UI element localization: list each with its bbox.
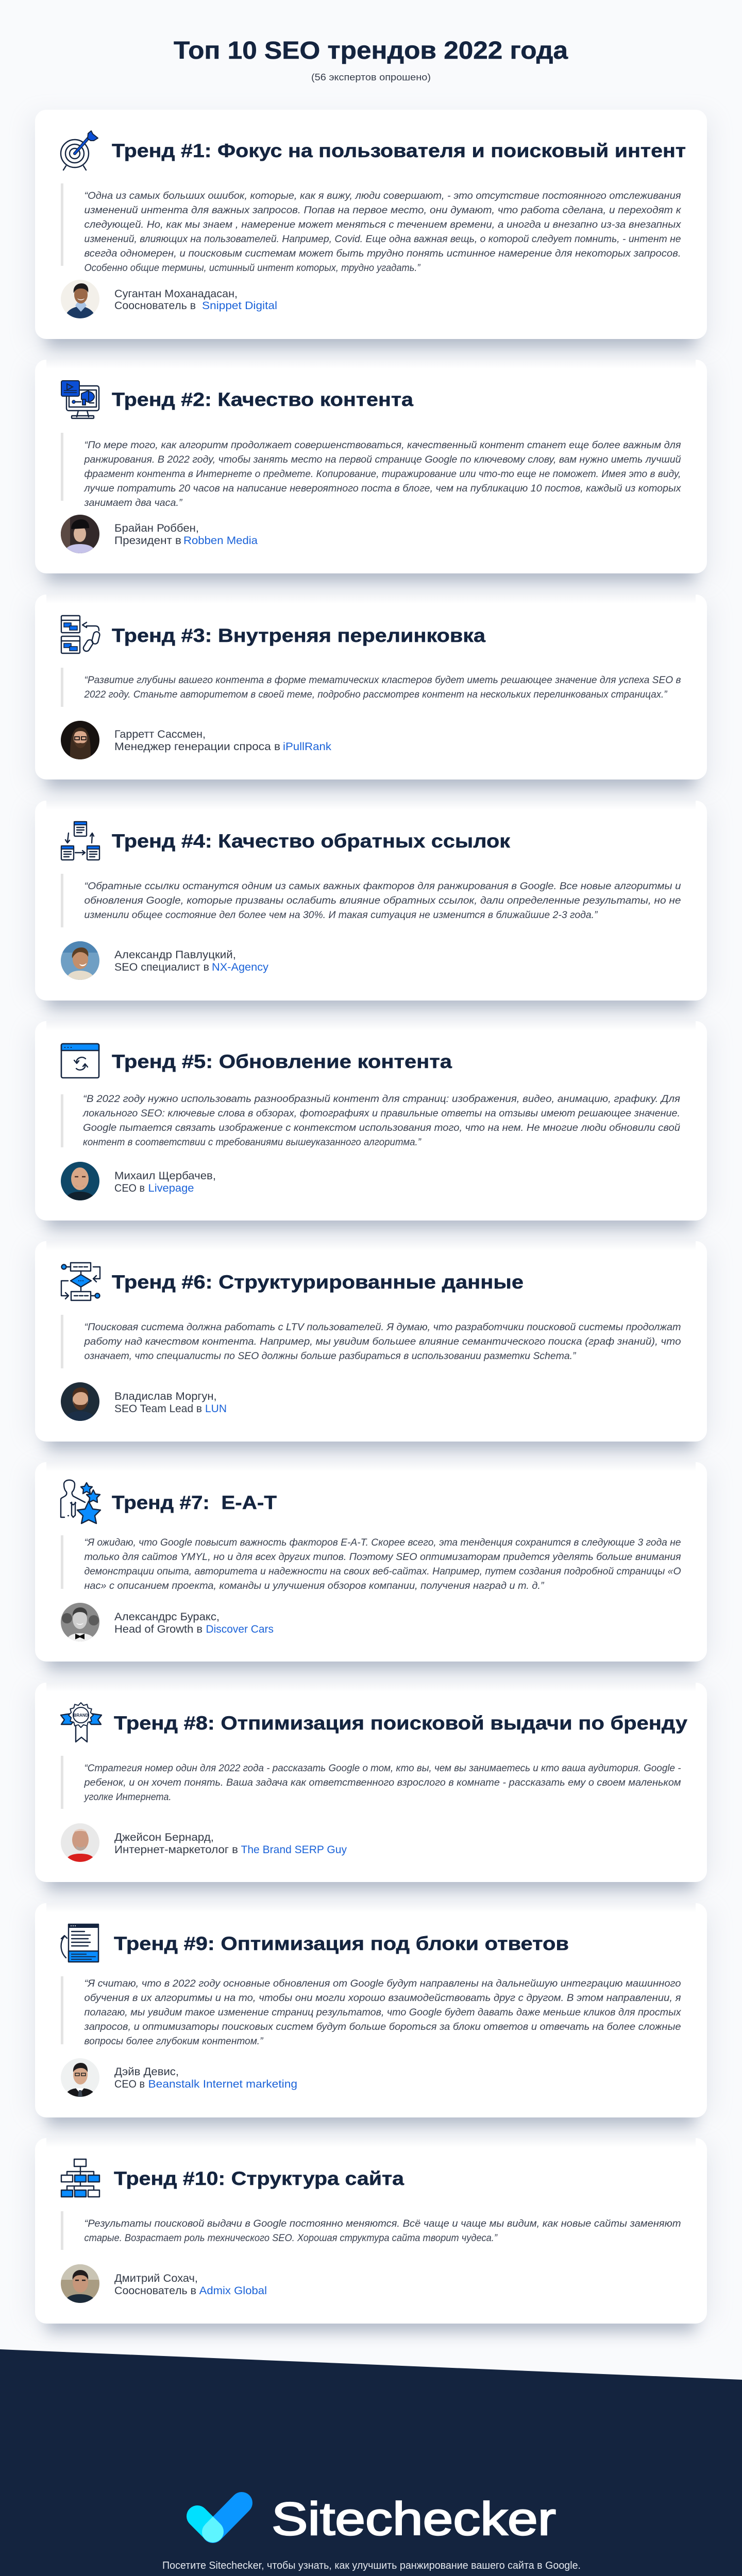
quote: вопросы более глубоким контентом.” [85, 2036, 264, 2047]
quote [85, 1537, 681, 1591]
attribution: LUN [205, 1403, 227, 1415]
title: Топ 10 SEO трендов 2022 года [174, 37, 568, 64]
quote bar [61, 874, 63, 927]
heading: Тренд #3: Внутреняя перелинковка [112, 625, 485, 646]
quote bar [61, 1976, 63, 2044]
attribution [114, 2066, 297, 2090]
quote: ребенок, и он хочет понять. Ваша задача как ответственного взрослого в комнате - рассказать ему о своем маленьком [83, 1777, 681, 1788]
attribution: Президент в [114, 535, 181, 547]
quote: всегда одномерен, и поисковым системам может быть трудно понять истинное намерение для некоторых запросов. [85, 248, 681, 259]
attribution: Дэйв Девис, [114, 2066, 179, 2078]
attribution: Соосноватeль в [114, 300, 196, 312]
heading: Тренд #6: Структурированные данные [112, 1272, 524, 1293]
attribution [114, 1611, 274, 1635]
attribution: Владислав Моргун, [114, 1391, 217, 1402]
subtitle: (56 экспертов опрошено) [311, 72, 431, 82]
quote bar [61, 1315, 63, 1368]
logo mark [197, 2503, 242, 2532]
quote: “Я ожидаю, что Google повысит важность факторов E-A-T. Скорее всего, эта тенденция сохранится в следующие 3 года не [85, 1537, 681, 1548]
quote: нас» с описанием проекта, команды и улучшения обзоров компании, получения наград и т. д.” [85, 1581, 545, 1591]
quote: локального SEO: ключевые слова в обзорах, фотографиях и правильные ответы на отзывы имеют решающее значение. [82, 1108, 680, 1119]
quote: означает, что специалисты по SEO должны больше разбираться в использовании разметки Schema.” [85, 1351, 577, 1362]
avatar: Дмитрий Сохач [61, 2264, 99, 2303]
attribution [114, 1391, 227, 1415]
quote [85, 881, 681, 921]
heading: Тренд #5: Обновление контента [112, 1051, 452, 1072]
avatar: Александрс Буракс [61, 1603, 99, 1641]
panel: trend 5 [31, 1021, 711, 1229]
avatar: Брайан Роббен [61, 515, 99, 553]
attribution: Михаил Щербачев, [114, 1170, 216, 1182]
panel: trend 6 [31, 1241, 711, 1450]
quote: запросов, и оптимизаторы поисковых систем будут больше бороться за блоки ответов и отвечать на более сложные [83, 2022, 681, 2032]
quote [83, 1978, 682, 2047]
attribution [114, 288, 277, 312]
attribution: NX-Agency [212, 961, 269, 973]
attribution: Snippet Digital [202, 300, 277, 312]
attribution: Head of Growth в [114, 1623, 203, 1635]
quote: “Я считаю, что в 2022 году основные обновления от Google будут направлены на дальнейшую интеграцию машинного [85, 1978, 681, 1989]
quote bar [61, 433, 63, 501]
attribution: Александрс Буракс, [114, 1611, 220, 1623]
panel: trend 9 [31, 1903, 711, 2126]
quote: “Обратные ссылки останутся одним из самых важных факторов для ранжирования в Google. Все новые алгоритмы и [85, 881, 681, 892]
attribution: Джейсон Бернард, [114, 1832, 214, 1843]
attribution: Александр Павлуцкий, [114, 949, 236, 961]
quote: ранжирования. В 2022 году, чтобы занять место на первой странице Google по ключевому слову, вам нужно иметь лучший [83, 454, 681, 465]
attribution: Сугантан Моханадасан, [114, 288, 238, 300]
quote [84, 675, 681, 700]
attribution: Менеджер генерации спроса в [114, 741, 280, 753]
attribution: The Brand SERP Guy [241, 1844, 347, 1856]
quote: фрагмент контента в Интернете о предмете. Копирование, тиражирование или что-то еще не поможет. Имея это в виду, [85, 469, 681, 480]
attribution: Admix Global [199, 2285, 267, 2297]
heading: Тренд #9: Оптимизация под блоки ответов [114, 1933, 569, 1954]
quote: изменили общее состояние дел более чем на 30%. И такая ситуация не изменится в ближайшие 2-3 года.” [85, 910, 598, 921]
attribution: СЕО в [114, 2078, 145, 2090]
heading: Тренд #7: E-A-T [112, 1492, 277, 1513]
avatar: Михаил Щербачев [61, 1162, 99, 1200]
quote [83, 440, 682, 509]
quote: лучше потратить 20 часов на написание невероятного поста в блоге, чем на публикацию 10 постов, каждый из которых [83, 483, 682, 494]
attribution [114, 522, 258, 547]
avatar: Александр Павлуцкий [61, 941, 99, 980]
tagline: Посетите Sitechecker, чтобы узнать, как улучшить ранжирование вашего сайта в Google. [162, 2560, 581, 2571]
attribution: Гарретт Сассмен, [114, 728, 206, 740]
quote: “По мере того, как алгоритм продолжает совершенствоваться, качественный контент станет еще более важным для [85, 440, 681, 451]
attribution: Брайан Роббен, [114, 522, 199, 534]
quote: работу над качеством контента. Например, мы увидим большее влияние семантического поиска (граф знаний), что [83, 1336, 681, 1347]
attribution: Discover Cars [206, 1623, 274, 1635]
panel: trend 2 [31, 360, 711, 582]
quote: контент в соответствии с требованиями вышеуказанного алгоритма.” [83, 1137, 422, 1148]
icon: brand badge: BRAND [74, 1713, 89, 1718]
panel: trend 7 [31, 1462, 711, 1670]
quote bar [61, 1756, 63, 1809]
icon: target with arrow [61, 131, 98, 170]
quote: обновления Google, которые призваны ослабить влияние обратных ссылок, дали определенные результаты, но не [85, 895, 681, 906]
quote: “Результаты поисковой выдачи в Google постоянно меняются. Всё чаще и чаще мы видим, как новые сайты заменяют [85, 2218, 681, 2229]
quote [83, 1763, 681, 1803]
attribution [114, 1170, 216, 1194]
quote [83, 1322, 681, 1362]
quote: обучения в их алгоритмы и на то, чтобы они могли хорошо взаимодействовать друг с другом. В этом направлении, я [85, 1993, 681, 2004]
quote: Особенно общие термины, истинный интент которых, трудно угадать.” [85, 263, 421, 274]
attribution: Дмитрий Сохач, [114, 2273, 198, 2284]
quote: уголке Интернета. [83, 1792, 171, 1803]
avatar: Владислав Моргун [61, 1382, 99, 1421]
attribution: Соосноватeль в [114, 2285, 196, 2297]
attribution: Интернет-маркетолог в [114, 1844, 238, 1856]
icon: monitor with video card [61, 381, 99, 418]
attribution: SEO Team Lead в [114, 1403, 202, 1415]
attribution: iPullRank [283, 741, 332, 753]
quote: “Развитие глубины вашего контента в форме тематических кластеров будет иметь решающее значение для успеха SEO в [85, 675, 681, 686]
avatar: Сугантан Моханадасан [61, 280, 99, 318]
icon: answer block document [61, 1924, 98, 1962]
quote bar [61, 1535, 63, 1589]
footer panel [0, 2349, 742, 2576]
quote bar [61, 183, 63, 266]
quote [85, 191, 682, 274]
icon: site structure tree [61, 2159, 99, 2197]
attribution: Beanstalk Internet marketing [148, 2078, 297, 2090]
avatar: Дэйв Девис [61, 2058, 99, 2097]
quote: Google пытается связать изображение с контекстом использования того, что на нем. Не многие люди обновили свой [83, 1123, 680, 1133]
quote: изменений, влияющих на пользователей. Например, Covid. Еще одна важная вещь, о которой следует помнить, - интент не [85, 234, 681, 245]
quote: “Стратегия номер один для 2022 года - рассказать Google о том, кто вы, чем вы занимаетесь и кто ваша аудитория. Google - [85, 1763, 681, 1774]
quote: следующей. Но, как мы знаем , намерение может меняться с течением времени, а иногда и внезапно из-за внезапных [85, 219, 682, 230]
quote: “Поисковая система должна работать с LTV пользователей. Я думаю, что разработчики поисковой системы продолжат [85, 1322, 681, 1333]
quote: только для сайтов YMYL, но и для всех других типов. Поэтому SEO оптимизаторам придется уделять больше внимания [85, 1552, 681, 1563]
avatar: Гарретт Сассмен [61, 721, 99, 759]
quote: “В 2022 году нужно использовать разнообразный контент для страниц: изображения, видео, анимацию, графику. Для [83, 1094, 680, 1105]
panel: trend 10 [31, 2138, 711, 2332]
heading: Тренд #1: Фокус на пользователя и поисковый интент [112, 140, 686, 161]
panel: trend 3 [31, 595, 711, 788]
attribution [114, 728, 332, 753]
panel: trend 4 [31, 801, 711, 1009]
quote: занимает два часа.” [83, 498, 183, 509]
icon: brand badge [61, 1703, 102, 1742]
icon: linked windows [61, 616, 100, 653]
quote bar [61, 668, 63, 707]
icon: expert with stars [61, 1480, 100, 1523]
quote [82, 1094, 680, 1148]
quote: 2022 году. Станьте авторитетом в своей теме, подробно рассмотрев контент на нескольких перелинкованых страницах.” [84, 689, 668, 700]
heading: Тренд #8: Отпимизация поисковой выдачи по бренду [114, 1713, 687, 1734]
quote: изменений интента для важных запросов. Попав на первое место, они думают, что работа сделана, и переходят к [85, 205, 682, 216]
attribution: СЕО в [114, 1182, 145, 1194]
quote [85, 2218, 681, 2244]
heading: Тренд #2: Качество контента [112, 389, 413, 410]
attribution [114, 2273, 267, 2297]
quote: демонстрации опыта, авторитета и надежности на своих веб-сайтах. Например, путем создания подробной страницы «О [85, 1566, 681, 1577]
avatar: Джейсон Бернард [61, 1823, 99, 1862]
panel: trend 1 [31, 110, 711, 348]
attribution: SEO специалист в [114, 961, 209, 973]
quote bar [61, 1094, 63, 1147]
attribution: Livepage [148, 1182, 194, 1194]
quote: “Одна из самых больших ошибок, которые, как я вижу, люди совершают, - это отсутствие постоянного отслеживания [85, 191, 681, 201]
quote: старые. Возрастает роль технического SEO. Хорошая структура сайта творит чудеса.” [85, 2233, 498, 2244]
attribution: Robben Media [183, 535, 258, 547]
attribution [114, 1832, 347, 1856]
quote bar [61, 2211, 63, 2250]
icon: backlinks cycle of pages [61, 822, 99, 860]
icon: flowchart [61, 1263, 100, 1300]
quote: полагаю, мы увидим такое изменение страниц результатов, что Google будет давать даже меньше кликов для простых [85, 2007, 682, 2018]
icon: refresh window [61, 1044, 99, 1078]
attribution [114, 949, 269, 973]
heading: Тренд #10: Структура сайта [114, 2168, 404, 2189]
panel: trend 8 [31, 1683, 711, 1891]
heading: Тренд #4: Качество обратных ссылок [112, 831, 511, 852]
logo wordmark: Sitechecker [272, 2494, 556, 2545]
